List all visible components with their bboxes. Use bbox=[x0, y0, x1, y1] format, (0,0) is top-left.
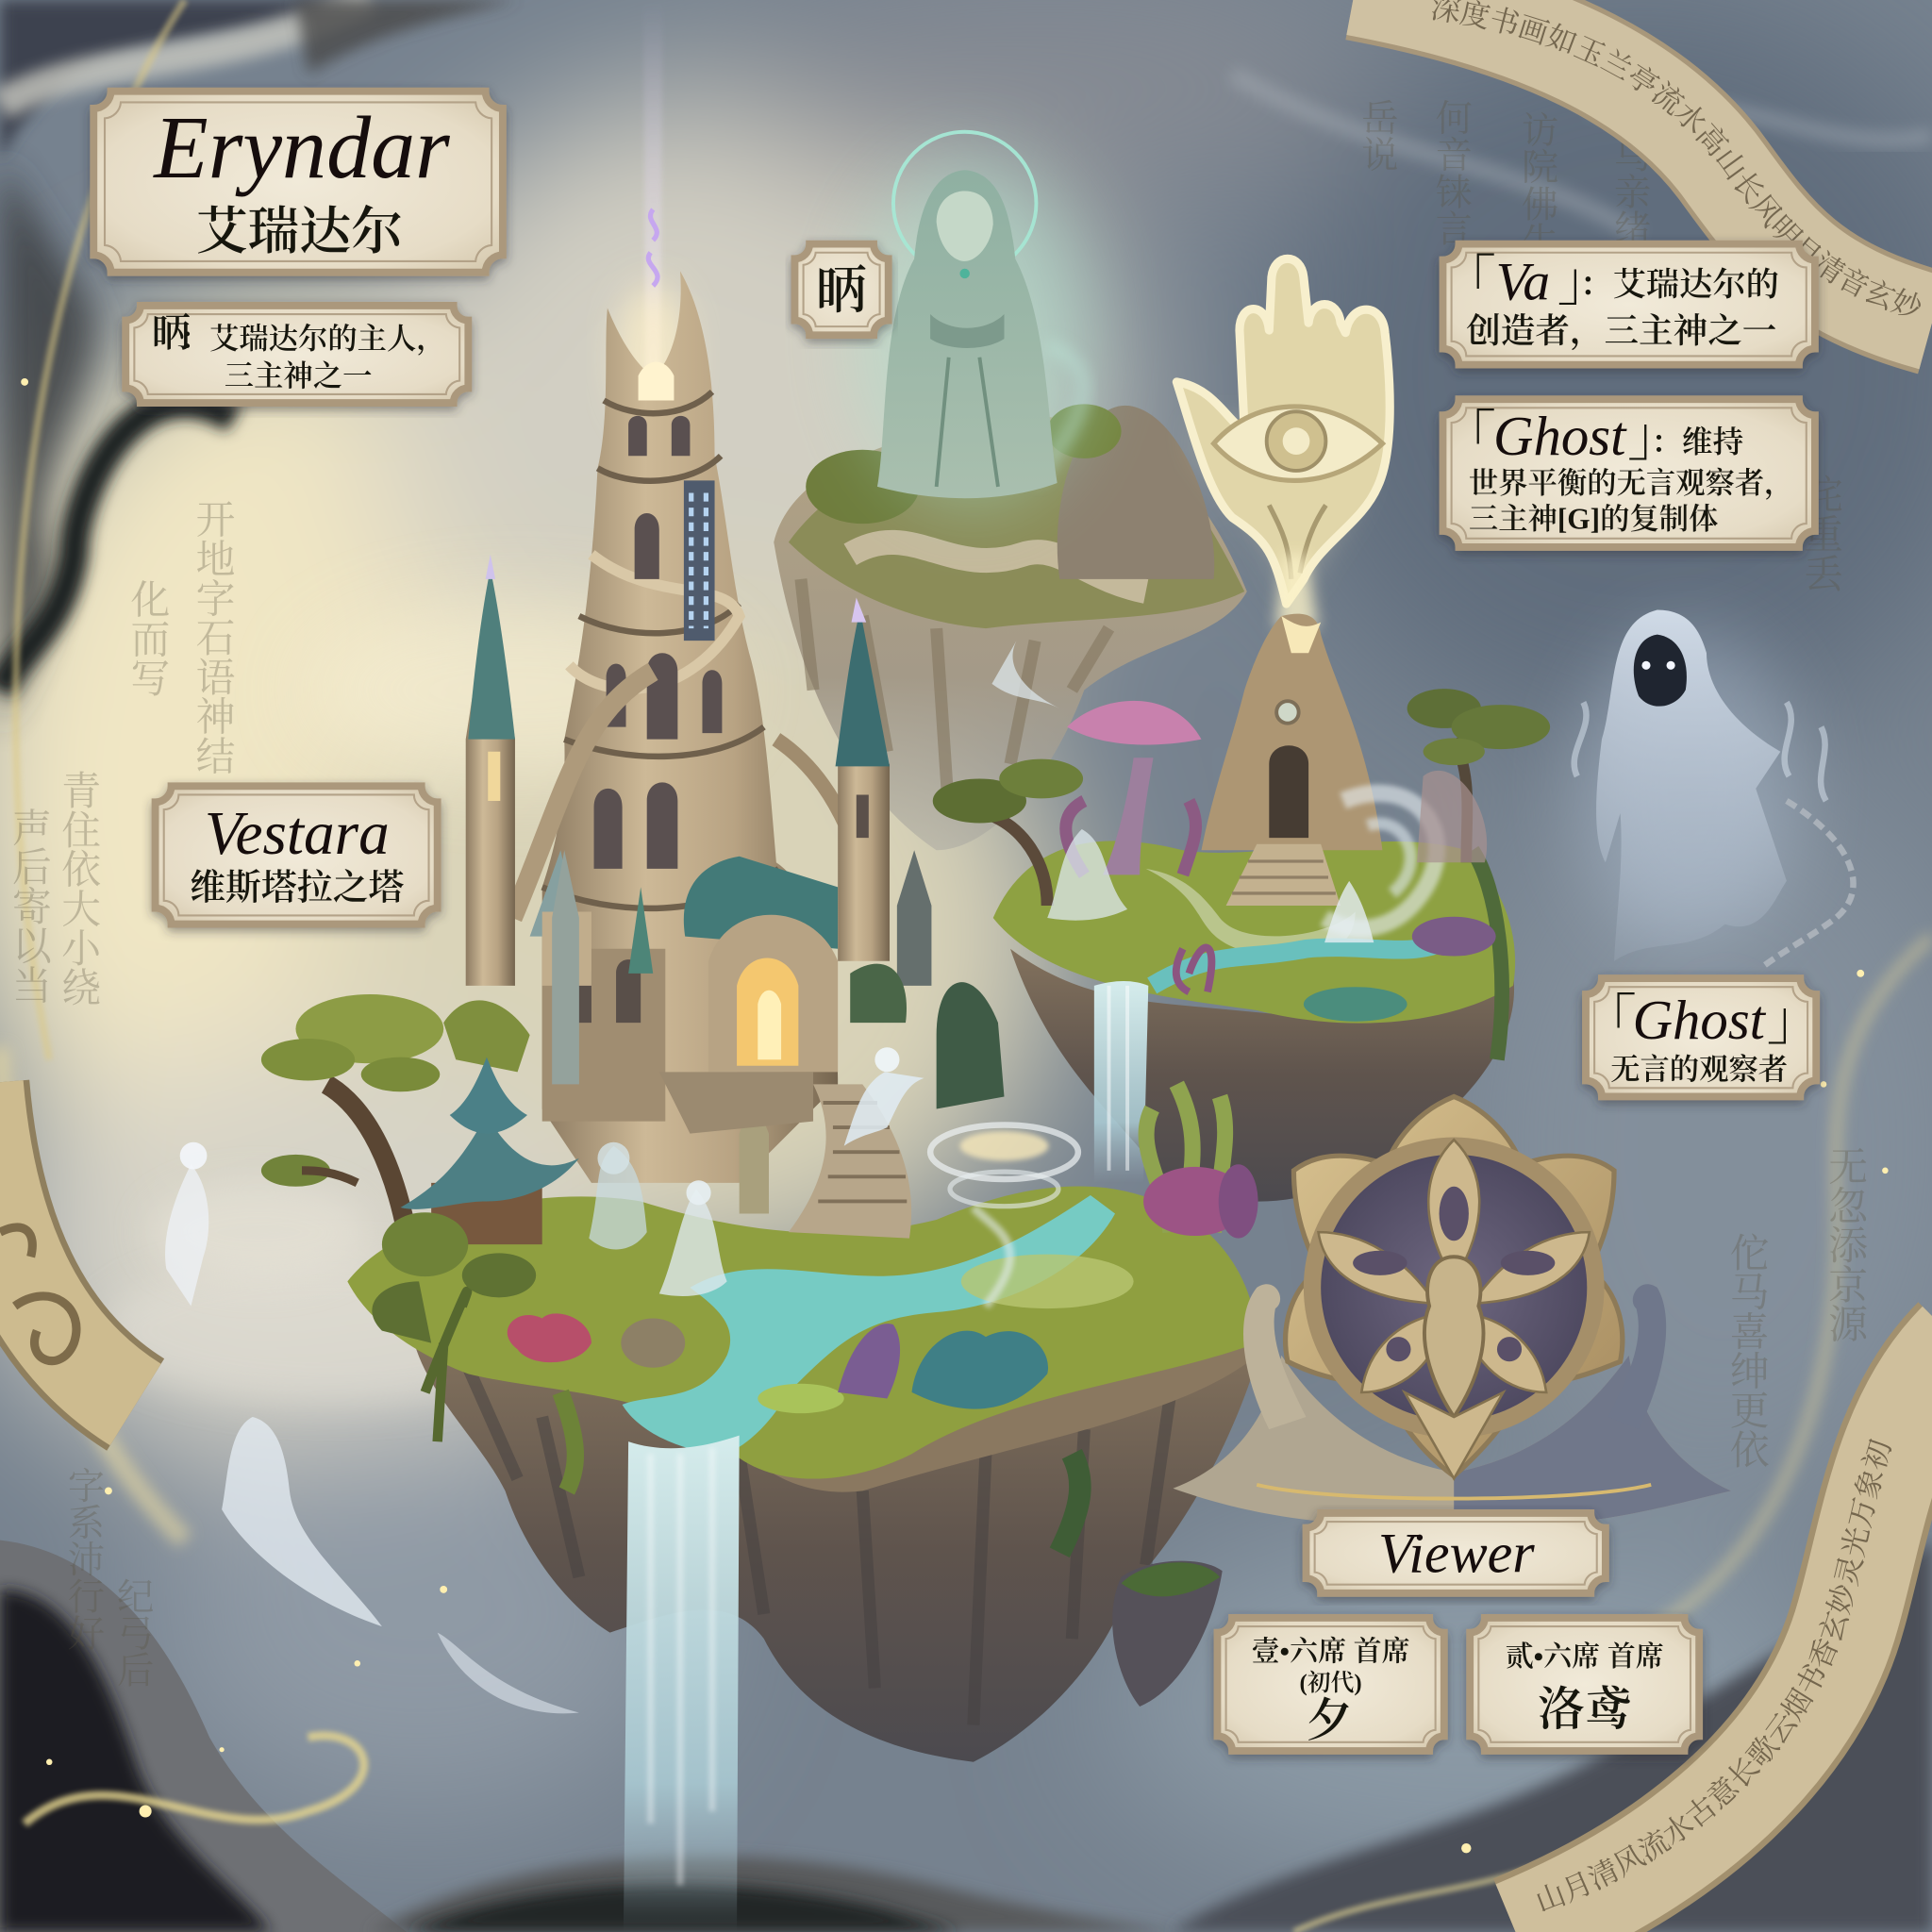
tower turrets bbox=[443, 555, 1004, 1109]
faded calligraphy: 岳说 bbox=[1354, 98, 1407, 173]
panel: Va description: ：艾瑞达尔的 bbox=[1579, 266, 1779, 303]
faded calligraphy: 化而写 bbox=[122, 579, 178, 697]
panel: Ghost description: 「 bbox=[1441, 408, 1496, 467]
bonsai tree and pagoda bbox=[261, 994, 579, 1297]
panel: second seat bbox=[1470, 1618, 1699, 1751]
panel: 昞 description: ：艾瑞达尔的主人， bbox=[180, 323, 446, 357]
label: 昞 bbox=[794, 244, 889, 335]
right floating island bbox=[993, 841, 1515, 1202]
flowers on upper platform bbox=[1143, 1084, 1258, 1239]
panel: second seat: 贰•六席 首席 bbox=[1506, 1641, 1664, 1673]
faded calligraphy: 佗马喜绅更依 bbox=[1722, 1232, 1778, 1469]
faded calligraphy: 青住依大小绕 bbox=[53, 770, 109, 1007]
panel: Vestara tower: 维斯塔拉之塔 bbox=[190, 868, 404, 908]
faded calligraphy: 无忽添京源 bbox=[1820, 1146, 1876, 1343]
wind swirl and spirits on right island bbox=[991, 641, 1496, 1022]
emblem: five-seat medallion bbox=[1286, 1096, 1623, 1478]
hand and eye symbol bbox=[1176, 258, 1390, 628]
panel: Vestara tower: Vestara bbox=[205, 800, 390, 868]
Vestara tower bbox=[512, 0, 857, 1183]
panel: 昞 description bbox=[125, 306, 468, 403]
title panel: Eryndar bbox=[93, 92, 503, 273]
panel: Va description: 「 bbox=[1441, 252, 1496, 311]
panel: Viewer bbox=[1306, 1513, 1606, 1593]
panel: second seat: 洛鸢 bbox=[1538, 1684, 1631, 1736]
panel: Ghost description: Ghost bbox=[1493, 406, 1627, 467]
scroll: bottom right: 山月清风流水古意长歌云烟书香玄妙灵光万象初 bbox=[1537, 1439, 1891, 1911]
title panel: Eryndar: Eryndar bbox=[152, 99, 450, 197]
faded calligraphy: 开地字石语神结 bbox=[188, 499, 244, 775]
panel: Vestara tower bbox=[156, 786, 438, 924]
panel: 昞 description: 三主神之一 bbox=[225, 359, 372, 392]
panel: 昞 description: 昞 bbox=[152, 312, 191, 356]
faded calligraphy: 何音铼言 bbox=[1427, 98, 1480, 246]
panel: first seat: (初代) bbox=[1300, 1670, 1362, 1696]
scroll: top right bbox=[1345, 0, 1932, 366]
panel: Ghost description bbox=[1441, 399, 1815, 547]
stone staircase bbox=[659, 1072, 911, 1239]
panel: first seat bbox=[1217, 1618, 1444, 1751]
faded calligraphy: 声后寄以当 bbox=[4, 808, 60, 1004]
faded calligraphy: 访院佛生 bbox=[1514, 111, 1567, 258]
panel: Ghost label: 「 bbox=[1582, 991, 1637, 1051]
panel: Va description: 」 bbox=[1557, 252, 1611, 311]
panel: Va description: Va bbox=[1496, 252, 1550, 311]
lower waterfall bbox=[624, 1436, 740, 1932]
scroll: bottom right bbox=[1494, 1306, 1932, 1932]
silent observer ghost bbox=[1574, 610, 1854, 967]
label: 昞: 昞 bbox=[816, 262, 868, 320]
emblem: pedestal bbox=[1173, 1284, 1731, 1528]
faded calligraphy bbox=[4, 98, 1876, 1688]
small floating rock bbox=[1112, 1561, 1223, 1707]
scroll: left ornament ribbon bbox=[0, 1084, 136, 1405]
panel: Ghost description: 三主神[G]的复制体 bbox=[1469, 502, 1718, 535]
goddess statue with halo bbox=[857, 132, 1091, 506]
panel: Ghost label bbox=[1582, 978, 1821, 1096]
panel: Ghost label: 」 bbox=[1767, 991, 1821, 1051]
faded calligraphy: 字系沛行好 bbox=[59, 1466, 112, 1651]
panel: Ghost label: 无言的观察者 bbox=[1610, 1053, 1788, 1086]
faded calligraphy: 隐鸟亲绪 bbox=[1607, 98, 1659, 247]
panel: Va description bbox=[1441, 244, 1815, 365]
panel: Ghost label: Ghost bbox=[1633, 990, 1767, 1051]
faded calligraphy: 纪弓后 bbox=[109, 1577, 162, 1688]
spirits on main island bbox=[589, 1047, 924, 1296]
drifting ghosts on the left bbox=[165, 1142, 579, 1713]
panel: Viewer: Viewer bbox=[1378, 1522, 1535, 1585]
title panel: Eryndar: 艾瑞达尔 bbox=[196, 203, 404, 260]
faded calligraphy: 诧重丢 bbox=[1795, 475, 1852, 593]
panel: Ghost description: ：维持 bbox=[1651, 425, 1743, 459]
main floating island bbox=[347, 1187, 1263, 1762]
panel: first seat: 壹•六席 首席 bbox=[1252, 1637, 1410, 1668]
pink mushroom and bonsai trees bbox=[933, 689, 1550, 906]
right waterfall bbox=[1094, 981, 1148, 1183]
panel: Ghost description: 」 bbox=[1627, 408, 1682, 467]
panel: Va description: 创造者，三主神之一 bbox=[1466, 311, 1776, 350]
swirling vortex bbox=[930, 1124, 1078, 1306]
shrine with beam bbox=[1201, 614, 1382, 906]
panel: Ghost description: 世界平衡的无言观察者， bbox=[1469, 466, 1794, 500]
sparkles bbox=[21, 378, 1889, 1853]
panel: first seat: 夕 bbox=[1306, 1694, 1353, 1746]
floating island: goddess island bbox=[774, 404, 1247, 850]
